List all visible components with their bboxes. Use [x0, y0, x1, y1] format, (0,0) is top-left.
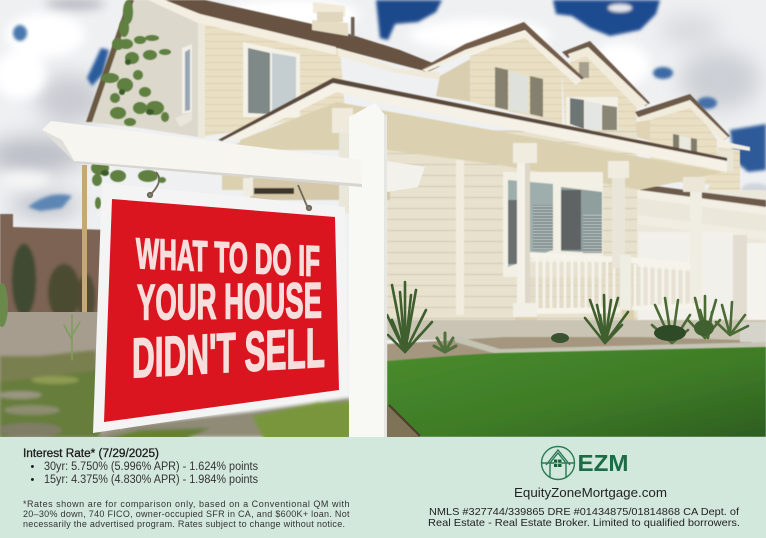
house: left sapling tree	[91, 0, 171, 209]
headline: what to do if your house didn't sell: DIDN'T SELL	[132, 316, 325, 389]
gable 1	[422, 22, 584, 124]
foreground: ground, gravel and lawn	[0, 312, 766, 440]
plant: center	[585, 295, 628, 343]
licensing text: NMLS #327744/339865 DRE #01434875/01814868 CA Dept. of	[429, 506, 739, 518]
porch columns	[513, 143, 705, 333]
crossbar right	[387, 161, 425, 192]
gable 3	[635, 94, 750, 197]
interest rates block: 15yr: 4.375% (4.830% APR) - 1.984% points	[44, 474, 258, 486]
headline: what to do if your house didn't sell	[132, 230, 325, 389]
house: porch wall and window	[218, 78, 727, 333]
disclaimer	[23, 499, 350, 529]
for-sale sign post	[42, 103, 425, 437]
sign panel	[93, 183, 348, 433]
icon: chimney	[312, 2, 354, 37]
porch window	[503, 172, 603, 277]
website: EquityZoneMortgage.com	[514, 485, 667, 500]
plant: small shrub	[434, 333, 456, 352]
post	[349, 103, 387, 437]
porch soffit	[240, 102, 723, 190]
red field	[104, 199, 339, 422]
porch roof edge	[218, 79, 727, 172]
interest rates block: Interest Rate* (7/29/2025)	[23, 448, 159, 460]
house: front gables with windows	[422, 22, 750, 197]
interest rates block: 30yr: 5.750% (5.996% APR) - 1.624% points	[44, 461, 258, 473]
logo: EZM house in circle: EZM	[578, 450, 628, 476]
interest rates block: •	[30, 461, 34, 473]
sign hanging hooks	[148, 172, 311, 210]
headline: what to do if your house didn't sell: WHAT TO DO IF	[136, 230, 320, 286]
window: gable side	[175, 44, 192, 127]
house: right garage	[636, 184, 766, 330]
disclaimer: 20–30% down, 740 FICO, owner-occupied SFR in CA, and $600K+ loan. Not	[23, 509, 350, 519]
interest rates block	[23, 448, 258, 486]
porch railing	[530, 252, 700, 314]
gravel and grass left of the sign	[0, 312, 120, 437]
porch post behind the sign	[332, 108, 353, 213]
crossbar left	[42, 121, 362, 186]
interest rates block: •	[30, 474, 34, 486]
plant: right cluster	[652, 296, 748, 343]
left background: brick wall and shrubs	[0, 165, 110, 322]
footer panel	[0, 437, 766, 538]
window: upper left	[243, 42, 300, 118]
disclaimer: *Rates shown are for comparison only, based on a Conventional QM with	[23, 499, 349, 509]
stone bed and curb by the house	[387, 320, 766, 362]
plants along the porch	[0, 282, 748, 360]
disclaimer: necessarily the advertised program. Rates subject to change without notice.	[23, 519, 345, 529]
licensing text: Real Estate - Real Estate Broker. Limited to qualified borrowers.	[428, 517, 740, 529]
licensing text	[428, 506, 740, 529]
lawn	[387, 347, 766, 437]
plant: left of porch	[387, 282, 432, 352]
house: upper left wing, roof and chimney	[86, 0, 440, 138]
gable 2	[562, 41, 650, 142]
logo: EZM house in circle	[542, 446, 628, 480]
headline: what to do if your house didn't sell: YOUR HOUSE	[137, 272, 322, 330]
patch under sign	[95, 398, 352, 440]
